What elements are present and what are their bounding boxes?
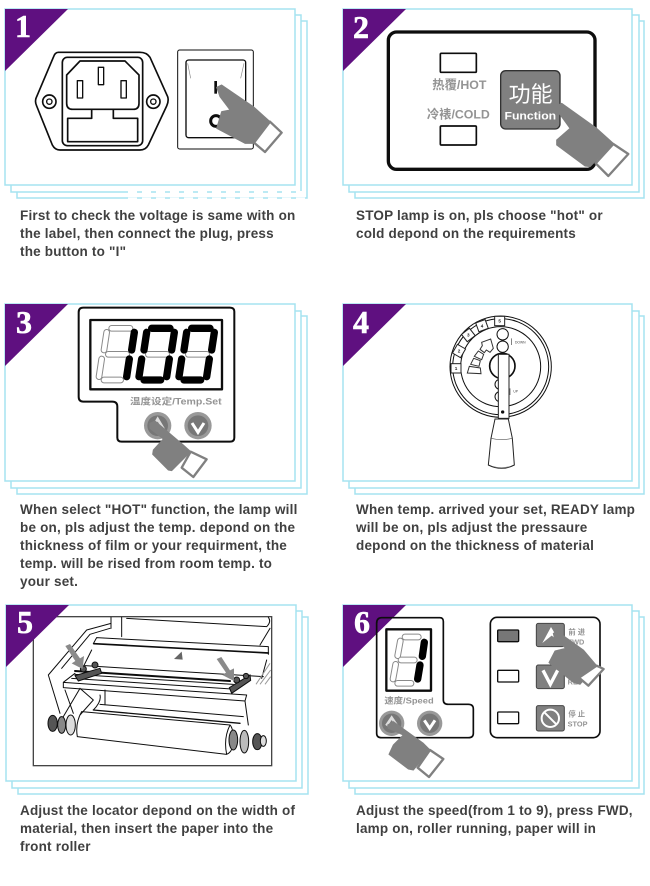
panel: step 4 [343, 304, 644, 553]
illustration: pressure dial and handle: 3 [467, 333, 470, 338]
caption 4: When temp. arrived your set, READY lamp [356, 502, 635, 517]
card stack 4 [343, 304, 644, 494]
panel: step 2 [343, 9, 644, 241]
badge 1: 1 [15, 8, 31, 44]
illustration: motor controls with hand: 前 进 [568, 627, 586, 636]
illustration: temperature display: 温度设定/Temp.Set [130, 395, 222, 406]
illustration: pressure dial and handle: UP [513, 390, 519, 394]
card stack 2 [343, 9, 644, 198]
illustration: function panel: Function [504, 110, 556, 122]
illustration: speed display [377, 618, 473, 777]
illustration: speed display: 速度/Speed [384, 695, 434, 706]
card stack 5 [6, 605, 308, 794]
caption 2: cold depond on the requirements [356, 226, 576, 241]
caption 3: temp. will be rised from room temp. to [20, 556, 272, 571]
illustration: pressure dial and handle: 1 [455, 366, 458, 371]
illustration: motor controls with hand: STOP [568, 719, 588, 728]
caption 2: STOP lamp is on, pls choose "hot" or [356, 208, 603, 223]
panel: step 5 [6, 604, 308, 854]
illustration: rocker switch with hand [178, 50, 282, 152]
badge 2: 2 [353, 9, 369, 45]
caption 5: Adjust the locator depond on the width of [20, 803, 295, 818]
illustration: motor controls with hand: RET [568, 677, 583, 686]
badge 5 [6, 604, 69, 667]
caption 3: thickness of film or your requirment, the [20, 538, 287, 553]
caption 5: material, then insert the paper into the [20, 821, 274, 836]
illustration: motor controls with hand: 停 止 [568, 709, 586, 718]
illustration: function panel: 冷裱/COLD [427, 107, 490, 122]
panel: step 6 [343, 604, 644, 836]
caption 3: your set. [20, 574, 78, 589]
badge 4: 4 [353, 304, 369, 340]
illustration: motor controls with hand: FWD [568, 637, 584, 646]
panel: step 1 [5, 8, 308, 259]
illustration: pressure dial and handle: 4 [481, 323, 484, 328]
caption 5: front roller [20, 839, 91, 854]
badge 3: 3 [16, 304, 32, 340]
illustration: function panel: 热覆/HOT [432, 77, 487, 92]
card stack 6 [343, 605, 644, 794]
illustration: pressure dial and handle [450, 316, 551, 468]
caption 1: the label, then connect the plug, press [20, 226, 274, 241]
caption 1: the button to "I" [20, 244, 126, 259]
caption 3: When select "HOT" function, the lamp will [20, 502, 298, 517]
badge 5: 5 [17, 604, 33, 640]
caption 6: Adjust the speed(from 1 to 9), press FWD, [356, 803, 633, 818]
illustration: power socket [35, 52, 168, 150]
caption 3: be on, pls adjust the temp. depond on the [20, 520, 295, 535]
badge 4 [343, 304, 406, 366]
illustration: temperature display [79, 308, 234, 477]
illustration: pressure dial and handle: 2 [458, 349, 461, 354]
badge 2 [343, 9, 406, 71]
panel: step 3 [5, 304, 307, 589]
badge 1 [5, 8, 68, 71]
card stack 1 [5, 9, 308, 198]
caption 1: First to check the voltage is same with on [20, 208, 295, 223]
illustration: roller locator [33, 617, 272, 766]
caption 4: will be on, pls adjust the pressaure [355, 520, 588, 535]
illustration: pressure dial and handle: DOWN [515, 340, 526, 344]
badge 6: 6 [354, 604, 370, 640]
caption 4: depond on the thickness of material [356, 538, 594, 553]
illustration: pressure dial and handle: 5 [498, 319, 501, 324]
caption 6: lamp on, roller running, paper will in [356, 821, 596, 836]
illustration: function panel [388, 32, 628, 176]
badge 6 [343, 604, 406, 667]
illustration: function panel: 功能 [509, 77, 553, 109]
card stack 3 [5, 304, 307, 494]
badge 3 [5, 304, 68, 366]
illustration: motor controls with hand [490, 617, 604, 738]
